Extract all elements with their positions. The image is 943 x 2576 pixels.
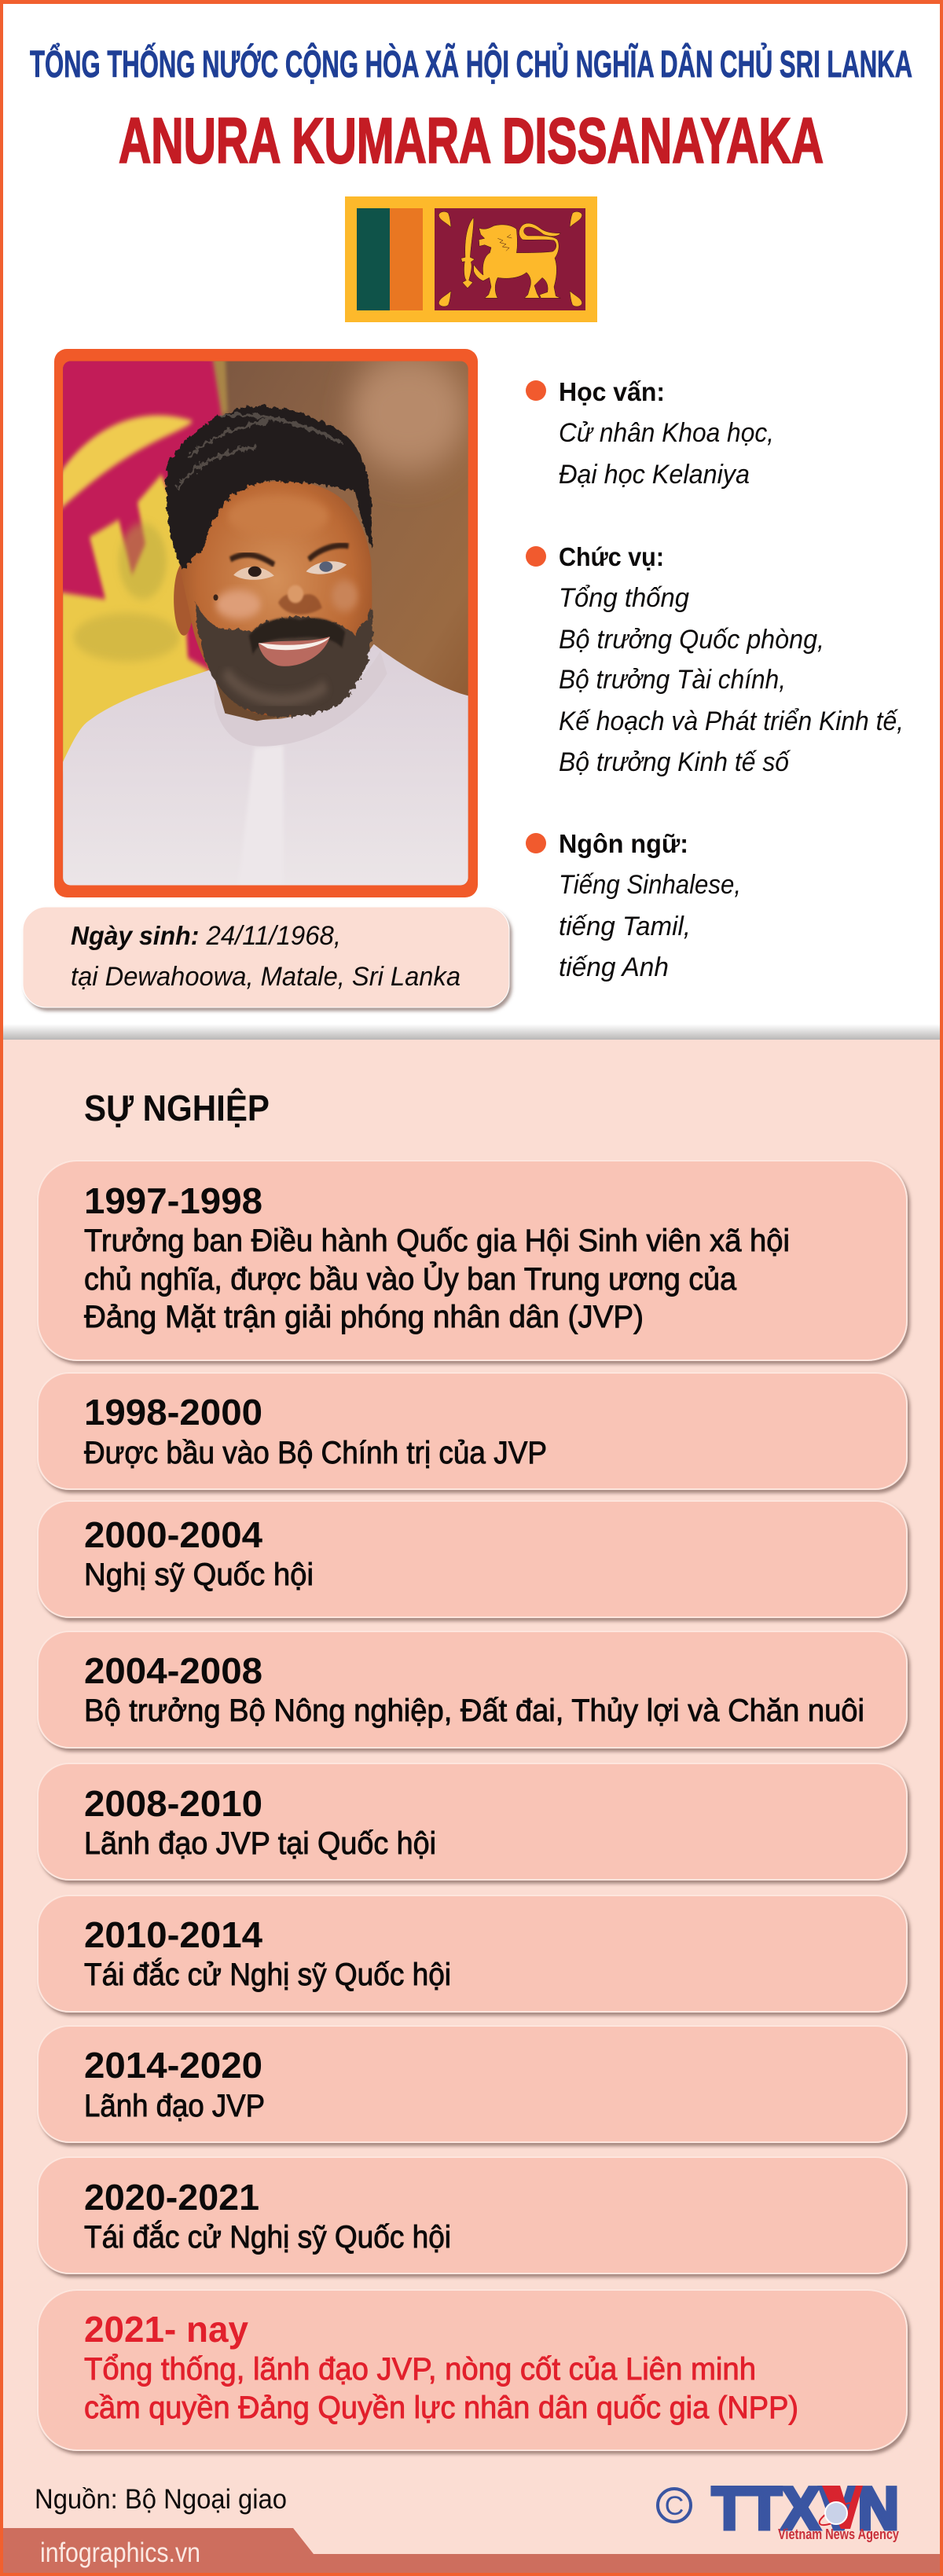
career card 1998-2000: 1998-2000 <box>84 1392 262 1433</box>
career card 2021-present: Tổng thống, lãnh đạo JVP, nòng cốt của Liên minh <box>84 2352 756 2387</box>
career card 2000-2004 <box>38 1501 907 1617</box>
icon: Sri Lanka flag <box>345 196 597 322</box>
copyright icon <box>658 2489 691 2522</box>
career card 1998-2000: Được bầu vào Bộ Chính trị của JVP <box>84 1436 547 1470</box>
logo: TTXVN: TTXVN <box>712 2475 899 2542</box>
birth place text: tại Dewahoowa, Matale, Sri Lanka <box>71 962 460 992</box>
birth date text: Ngày sinh: 24/11/1968, <box>71 921 341 951</box>
career card 2004-2008 <box>38 1631 907 1748</box>
footer website: infographics.vn <box>40 2537 200 2568</box>
career card 2010-2014: Tái đắc cử Nghị sỹ Quốc hội <box>84 1957 451 1992</box>
career card 2020-2021: 2020-2021 <box>84 2177 259 2218</box>
info: positions: Tổng thống <box>559 583 689 613</box>
career card 2021-present: 2021- nay <box>84 2309 248 2350</box>
portrait frame <box>54 349 478 897</box>
info: languages <box>526 829 741 982</box>
career card 2020-2021 <box>38 2157 907 2273</box>
career card 2010-2014 <box>38 1895 907 2012</box>
info: education <box>526 377 774 490</box>
career card 2014-2020: 2014-2020 <box>84 2045 262 2086</box>
career card 2004-2008: Bộ trưởng Bộ Nông nghiệp, Đất đai, Thủy lợi và Chăn nuôi <box>84 1693 864 1728</box>
pink career background <box>0 1040 943 2576</box>
career card 2021-present <box>38 2290 907 2450</box>
section shadow band <box>3 1024 940 1040</box>
logo: TTXVN: Vietnam News Agency <box>778 2526 899 2542</box>
info: languages: Tiếng Sinhalese, <box>559 870 741 900</box>
birth info box <box>23 907 509 1007</box>
career card 2008-2010: 2008-2010 <box>84 1783 262 1824</box>
info: positions: Kế hoạch và Phát triển Kinh tế, <box>559 706 904 736</box>
source: Nguồn: Bộ Ngoại giao <box>35 2484 287 2515</box>
info: positions: Bộ trưởng Quốc phòng, <box>559 625 824 655</box>
info: positions: Chức vụ: <box>559 542 664 571</box>
footer band <box>3 2528 940 2573</box>
career card 2010-2014: 2010-2014 <box>84 1914 262 1955</box>
info: positions: Bộ trưởng Kinh tế số <box>559 747 791 777</box>
career card 1998-2000 <box>38 1373 907 1489</box>
career card 2014-2020: Lãnh đạo JVP <box>84 2089 265 2123</box>
info: education: Cử nhân Khoa học, <box>559 418 774 448</box>
career card 2020-2021: Tái đắc cử Nghị sỹ Quốc hội <box>84 2219 451 2255</box>
info: languages: Ngôn ngữ: <box>559 829 688 858</box>
career card 1997-1998 <box>38 1161 907 1360</box>
copyright icon: C <box>665 2491 684 2521</box>
career card 2008-2010: Lãnh đạo JVP tại Quốc hội <box>84 1826 436 1861</box>
info: languages: tiếng Tamil, <box>559 912 691 941</box>
portrait photo <box>55 354 480 896</box>
career card 2008-2010 <box>38 1763 907 1880</box>
info: positions <box>526 542 904 777</box>
heading: career: SỰ NGHIỆP <box>84 1088 270 1128</box>
info: education: Học vấn: <box>559 377 665 406</box>
career card 2004-2008: 2004-2008 <box>84 1650 262 1691</box>
info: positions: Bộ trưởng Tài chính, <box>559 665 786 695</box>
career card 2021-present: cầm quyền Đảng Quyền lực nhân dân quốc gia (NPP) <box>84 2391 798 2425</box>
career card 2000-2004: 2000-2004 <box>84 1514 262 1555</box>
career card 1997-1998: chủ nghĩa, được bầu vào Ủy ban Trung ương của <box>84 1260 737 1297</box>
career card 2014-2020 <box>38 2026 907 2142</box>
info: education: Đại học Kelaniya <box>559 460 750 490</box>
career card 1997-1998: 1997-1998 <box>84 1180 262 1221</box>
info: languages: tiếng Anh <box>559 952 669 982</box>
career card 2000-2004: Nghị sỹ Quốc hội <box>84 1558 314 1592</box>
career card 1997-1998: Đảng Mặt trận giải phóng nhân dân (JVP) <box>84 1300 644 1334</box>
career card 1997-1998: Trưởng ban Điều hành Quốc gia Hội Sinh viên xã hội <box>84 1224 790 1258</box>
